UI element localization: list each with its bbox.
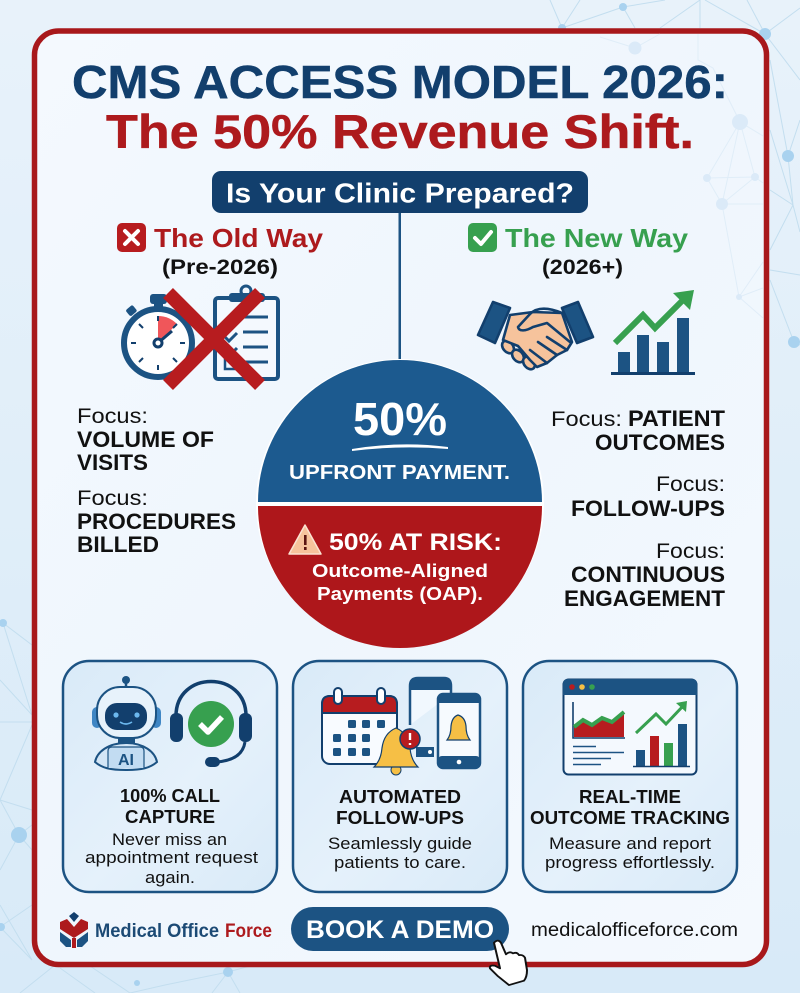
panel: call capture bbox=[63, 661, 277, 892]
upfront payment text bbox=[289, 393, 510, 484]
website url: medicalofficeforce.com bbox=[531, 919, 738, 941]
at-risk text with warning icon: 50% AT RISK: bbox=[329, 529, 502, 556]
text: automated follow-ups bbox=[328, 787, 472, 872]
icon: growth bar chart with arrow bbox=[611, 290, 695, 375]
logo: medical office force: Medical Office bbox=[95, 921, 219, 942]
text: real-time outcome tracking: progress effortlessly. bbox=[545, 853, 715, 872]
new way focus list: ENGAGEMENT bbox=[564, 586, 726, 611]
text: call capture: again. bbox=[145, 868, 195, 887]
old way focus list: Focus: bbox=[77, 487, 148, 510]
icon: handshake bbox=[478, 302, 593, 372]
new way focus list: FOLLOW-UPS bbox=[571, 496, 725, 521]
text: call capture bbox=[85, 786, 258, 887]
new way focus list: Focus: bbox=[656, 540, 725, 563]
subtitle pill: Is Your Clinic Prepared? bbox=[226, 178, 574, 208]
heading: the new way: (2026+) bbox=[542, 256, 623, 279]
text: automated follow-ups: patients to care. bbox=[334, 853, 466, 872]
text: automated follow-ups: AUTOMATED bbox=[339, 787, 461, 807]
heading: the old way: (Pre-2026) bbox=[162, 256, 278, 279]
text: automated follow-ups: FOLLOW-UPS bbox=[336, 808, 464, 828]
text: call capture: appointment request bbox=[85, 848, 258, 867]
old way focus list: VOLUME OF bbox=[77, 427, 214, 452]
at-risk text with warning icon: Outcome-Aligned bbox=[312, 561, 488, 581]
icon: crossed-out stopwatch and clipboard bbox=[124, 286, 278, 385]
button: book a demo bbox=[291, 907, 509, 951]
icon: AI robot: AI bbox=[118, 752, 134, 769]
text: call capture: CAPTURE bbox=[125, 807, 215, 827]
center connector line bbox=[398, 210, 401, 362]
text: call capture: 100% CALL bbox=[120, 786, 220, 806]
new way focus list: PATIENT bbox=[628, 406, 726, 431]
title bbox=[72, 56, 728, 158]
old way focus list bbox=[77, 405, 236, 557]
heading: the old way: The Old Way bbox=[154, 223, 324, 253]
panel: automated follow-ups bbox=[293, 661, 507, 892]
icon: AI robot bbox=[92, 676, 161, 770]
faint network inside card bbox=[600, 34, 763, 318]
central split circle bbox=[256, 359, 544, 648]
logo: medical office force: Force bbox=[225, 921, 272, 942]
heading: the new way: The New Way bbox=[505, 223, 689, 253]
new way focus list bbox=[551, 406, 726, 611]
upfront payment text: UPFRONT PAYMENT. bbox=[289, 462, 510, 484]
text: call capture: Never miss an bbox=[112, 830, 227, 849]
old way focus list: PROCEDURES bbox=[77, 509, 236, 534]
icon: analytics dashboard bbox=[563, 679, 697, 774]
text: real-time outcome tracking: Measure and report bbox=[549, 834, 711, 853]
text: real-time outcome tracking bbox=[530, 787, 730, 872]
old way focus list: VISITS bbox=[77, 450, 148, 475]
button: book a demo: BOOK A DEMO bbox=[306, 916, 494, 944]
logo: medical office force bbox=[60, 912, 272, 948]
icon: headset with check bbox=[170, 682, 252, 767]
old way focus list: Focus: bbox=[77, 405, 148, 428]
text: automated follow-ups: Seamlessly guide bbox=[328, 834, 472, 853]
icon: calendar, bell and phones bbox=[322, 678, 480, 775]
new way focus list: Focus: bbox=[551, 408, 622, 431]
icon: pointing hand cursor bbox=[490, 941, 527, 985]
title: CMS ACCESS MODEL 2026: bbox=[72, 56, 728, 108]
at-risk text with warning icon bbox=[289, 525, 502, 604]
panel: real-time outcome tracking bbox=[523, 661, 737, 892]
text: real-time outcome tracking: OUTCOME TRACKING bbox=[530, 808, 730, 828]
heading: the new way bbox=[468, 223, 689, 279]
subtitle pill bbox=[212, 171, 588, 213]
new way focus list: Focus: bbox=[656, 473, 725, 496]
text: real-time outcome tracking: REAL-TIME bbox=[579, 787, 681, 807]
new way focus list: CONTINUOUS bbox=[571, 562, 725, 587]
at-risk text with warning icon: Payments (OAP). bbox=[317, 584, 483, 604]
old way focus list: BILLED bbox=[77, 532, 159, 557]
upfront payment text: 50% bbox=[353, 393, 447, 445]
heading: the old way bbox=[117, 223, 324, 279]
new way focus list: OUTCOMES bbox=[595, 430, 725, 455]
title: The 50% Revenue Shift. bbox=[106, 105, 694, 158]
